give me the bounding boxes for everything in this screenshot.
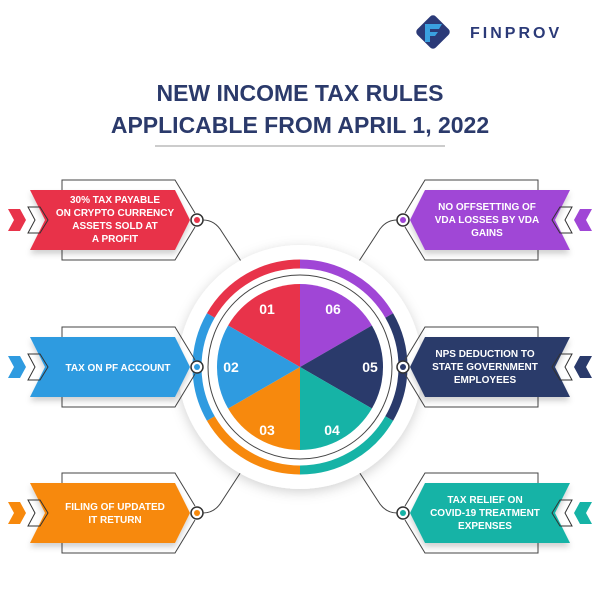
banner 6 purple: VDA LOSSES BY VDA: [435, 215, 539, 226]
banner 3 orange: [8, 473, 203, 553]
banner 6 purple: [397, 180, 592, 260]
banner 4 teal: EXPENSES: [458, 521, 512, 532]
title: APPLICABLE FROM APRIL 1, 2022: [111, 112, 489, 138]
central wheel: [178, 245, 422, 489]
banner 2 blue: [8, 327, 203, 407]
outer colored ring: [197, 264, 403, 470]
panel: left banners: [8, 180, 203, 553]
banner 1 red: A PROFIT: [92, 234, 138, 245]
pie segments: [217, 284, 383, 450]
banner 4 teal: TAX RELIEF ON: [447, 495, 523, 506]
banner 5 navy: NPS DEDUCTION TO: [435, 349, 535, 360]
banner 3 orange: IT RETURN: [88, 515, 142, 526]
icon: logo diamond: [415, 14, 451, 50]
banner 6 purple: NO OFFSETTING OF: [438, 202, 536, 213]
banner 2 blue: TAX ON PF ACCOUNT: [66, 363, 170, 374]
segment numbers: 01: [259, 301, 275, 317]
banner 5 navy: STATE GOVERNMENT: [432, 362, 538, 373]
panel: right banners: [397, 180, 592, 553]
segment numbers: 04: [324, 422, 340, 438]
segment numbers: 06: [325, 301, 341, 317]
logo: [415, 14, 562, 50]
banner 1 red: [8, 180, 203, 260]
banner 5 navy: EMPLOYEES: [454, 375, 516, 386]
banner 3 orange: FILING OF UPDATED: [65, 502, 165, 513]
banner 5 navy: [397, 327, 592, 407]
logo text: FINPROV: [470, 25, 562, 42]
segment numbers: 03: [259, 422, 275, 438]
connector lines: [203, 220, 397, 513]
title: NEW INCOME TAX RULES: [156, 80, 444, 106]
banner 1 red: ASSETS SOLD AT: [72, 221, 158, 232]
banner 1 red: 30% TAX PAYABLE: [70, 195, 160, 206]
banner 6 purple: GAINS: [471, 228, 503, 239]
segment numbers: 05: [362, 359, 378, 375]
banner 4 teal: COVID-19 TREATMENT: [430, 508, 540, 519]
segment numbers: [223, 301, 378, 438]
banner 1 red: ON CRYPTO CURRENCY: [56, 208, 174, 219]
banner 4 teal: [397, 473, 592, 553]
segment numbers: 02: [223, 359, 239, 375]
title: [111, 80, 489, 138]
